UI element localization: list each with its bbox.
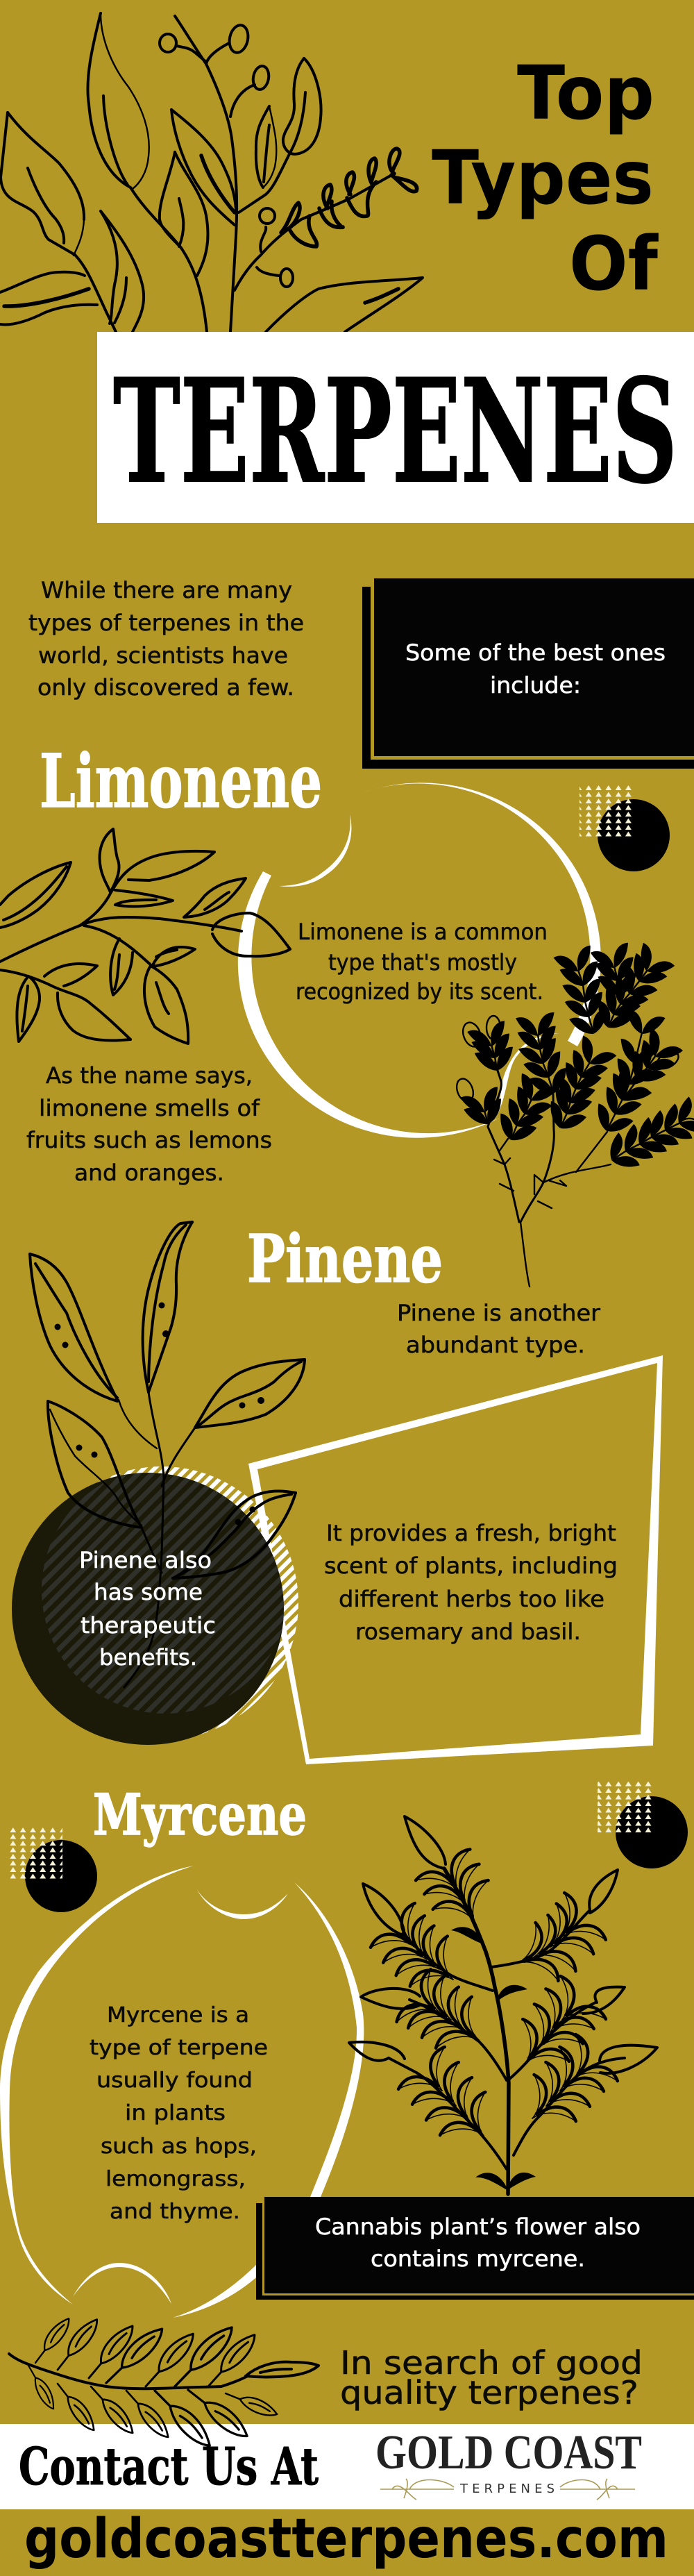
decorative dot: myrcene right bbox=[598, 1782, 688, 1868]
myrcene description: in plants bbox=[125, 2101, 226, 2125]
pinene plant bbox=[30, 1222, 305, 1687]
white polygon frame bbox=[248, 1355, 663, 1764]
pinene frame text bbox=[324, 1520, 618, 1645]
intro text: world, scientists have bbox=[38, 642, 288, 669]
pinene intro text: abundant type. bbox=[406, 1332, 585, 1358]
myrcene description: and thyme. bbox=[110, 2200, 240, 2224]
call to action text: In search of good bbox=[340, 2344, 643, 2382]
callout: best ones bbox=[362, 578, 694, 769]
intro text bbox=[28, 577, 304, 701]
myrcene fern bbox=[349, 1816, 657, 2194]
myrcene description bbox=[90, 2003, 268, 2224]
limonene description: type that's mostly bbox=[328, 949, 517, 976]
intro text: While there are many bbox=[41, 577, 292, 603]
myrcene description: lemongrass, bbox=[105, 2167, 246, 2191]
pinene therapeutic text bbox=[79, 1547, 216, 1671]
white ring: myrcene bbox=[0, 1866, 364, 2318]
limonene description: recognized by its scent. bbox=[296, 978, 543, 1005]
white ring: limonene bbox=[238, 783, 601, 1138]
limonene description bbox=[296, 919, 548, 1005]
pinene frame text: scent of plants, including bbox=[324, 1553, 618, 1579]
pinene therapeutic text: Pinene also bbox=[79, 1547, 212, 1573]
title: top types of: Types bbox=[432, 135, 654, 221]
decorative dot: myrcene left bbox=[7, 1826, 97, 1912]
right silhouette plant: limonene bbox=[454, 967, 694, 1287]
left leaf branch: limonene bbox=[0, 829, 290, 1044]
heading: limonene: Limonene bbox=[40, 737, 322, 824]
footer leaf branch bbox=[9, 2314, 319, 2452]
white contact band bbox=[0, 2424, 694, 2509]
logo: gold coast terpenes bbox=[375, 2426, 642, 2500]
pinene frame text: different herbs too like bbox=[339, 1586, 604, 1612]
call to action text bbox=[340, 2344, 643, 2411]
limonene description: Limonene is a common bbox=[298, 919, 548, 945]
myrcene description: Myrcene is a bbox=[107, 2003, 249, 2027]
pinene intro text: Pinene is another bbox=[397, 1300, 601, 1326]
pinene intro text bbox=[397, 1300, 601, 1358]
contact heading: Contact Us At bbox=[19, 2437, 319, 2497]
decorative dot: limonene bbox=[579, 785, 670, 871]
myrcene description: type of terpene bbox=[90, 2036, 268, 2060]
limonene smell text: limonene smells of bbox=[39, 1095, 260, 1121]
pinene frame text: rosemary and basil. bbox=[355, 1619, 581, 1645]
callout: best ones: Some of the best ones bbox=[405, 639, 666, 666]
heading: pinene: Pinene bbox=[247, 1221, 443, 1298]
pinene therapeutic text: therapeutic bbox=[81, 1612, 216, 1639]
limonene smell text bbox=[26, 1062, 272, 1186]
pinene frame text: It provides a fresh, bright bbox=[326, 1520, 616, 1546]
pinene therapeutic text: benefits. bbox=[99, 1644, 197, 1671]
call to action text: quality terpenes? bbox=[340, 2374, 638, 2411]
limonene smell text: As the name says, bbox=[46, 1062, 253, 1089]
intro text: types of terpenes in the bbox=[28, 610, 304, 636]
heading: myrcene: Myrcene bbox=[93, 1782, 307, 1848]
limonene smell text: and oranges. bbox=[74, 1160, 224, 1186]
header plant illustration bbox=[0, 13, 423, 332]
callout: cannabis: contains myrcene. bbox=[371, 2245, 585, 2272]
callout: cannabis bbox=[256, 2197, 694, 2300]
logo: gold coast terpenes: TERPENES bbox=[459, 2482, 555, 2496]
callout: best ones: include: bbox=[490, 672, 581, 699]
striped circle backdrop bbox=[25, 1466, 298, 1740]
pinene therapeutic text: has some bbox=[94, 1579, 203, 1605]
dark circle bbox=[12, 1466, 289, 1745]
myrcene description: such as hops, bbox=[101, 2134, 257, 2159]
limonene smell text: fruits such as lemons bbox=[26, 1127, 272, 1153]
title: top types of: Top bbox=[517, 51, 654, 137]
callout: cannabis: Cannabis plant’s flower also bbox=[315, 2214, 641, 2240]
logo: gold coast terpenes: GOLD COAST bbox=[375, 2426, 642, 2479]
title: top types of bbox=[432, 51, 659, 308]
title: top types of: Of bbox=[569, 221, 659, 308]
myrcene description: usually found bbox=[96, 2068, 253, 2093]
intro text: only discovered a few. bbox=[37, 674, 294, 701]
